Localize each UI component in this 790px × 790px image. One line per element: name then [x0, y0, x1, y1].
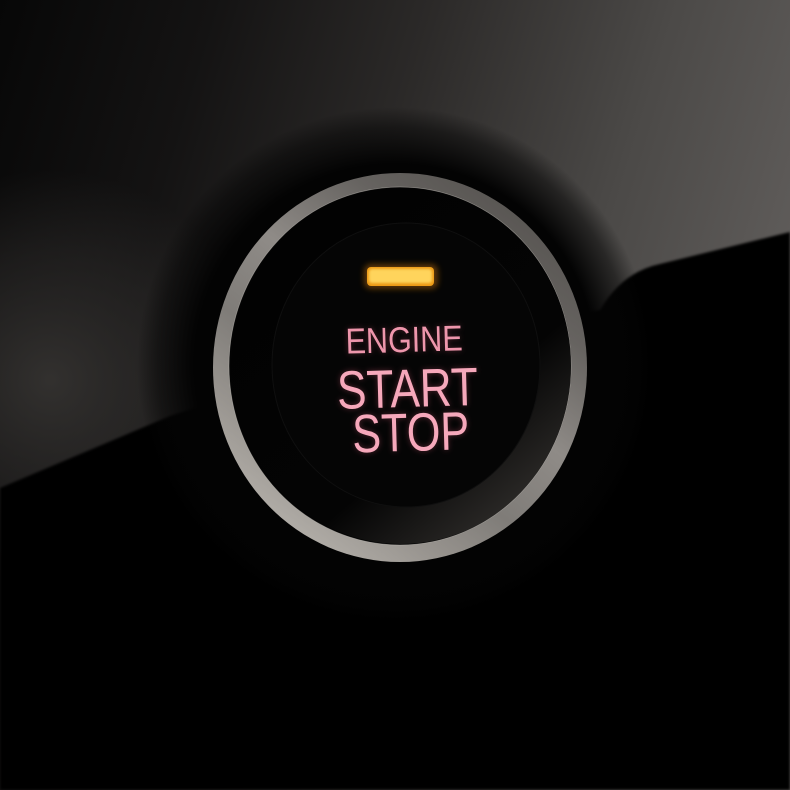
word: START: START	[336, 357, 479, 421]
label glow: ENGINE	[345, 317, 463, 362]
chrome button ring	[213, 173, 587, 562]
label glow: STOP	[351, 401, 470, 464]
label glow: START	[336, 357, 479, 421]
background: lower black dashboard panel	[0, 232, 790, 790]
button centre face	[272, 223, 540, 507]
button inner bezel	[231, 188, 571, 544]
amber indicator light	[364, 264, 438, 289]
word: STOP: STOP	[351, 401, 470, 464]
word: ENGINE: ENGINE	[345, 317, 463, 362]
label glow	[335, 317, 480, 465]
label: engine start stop	[335, 317, 480, 465]
button well shadow	[137, 107, 653, 623]
